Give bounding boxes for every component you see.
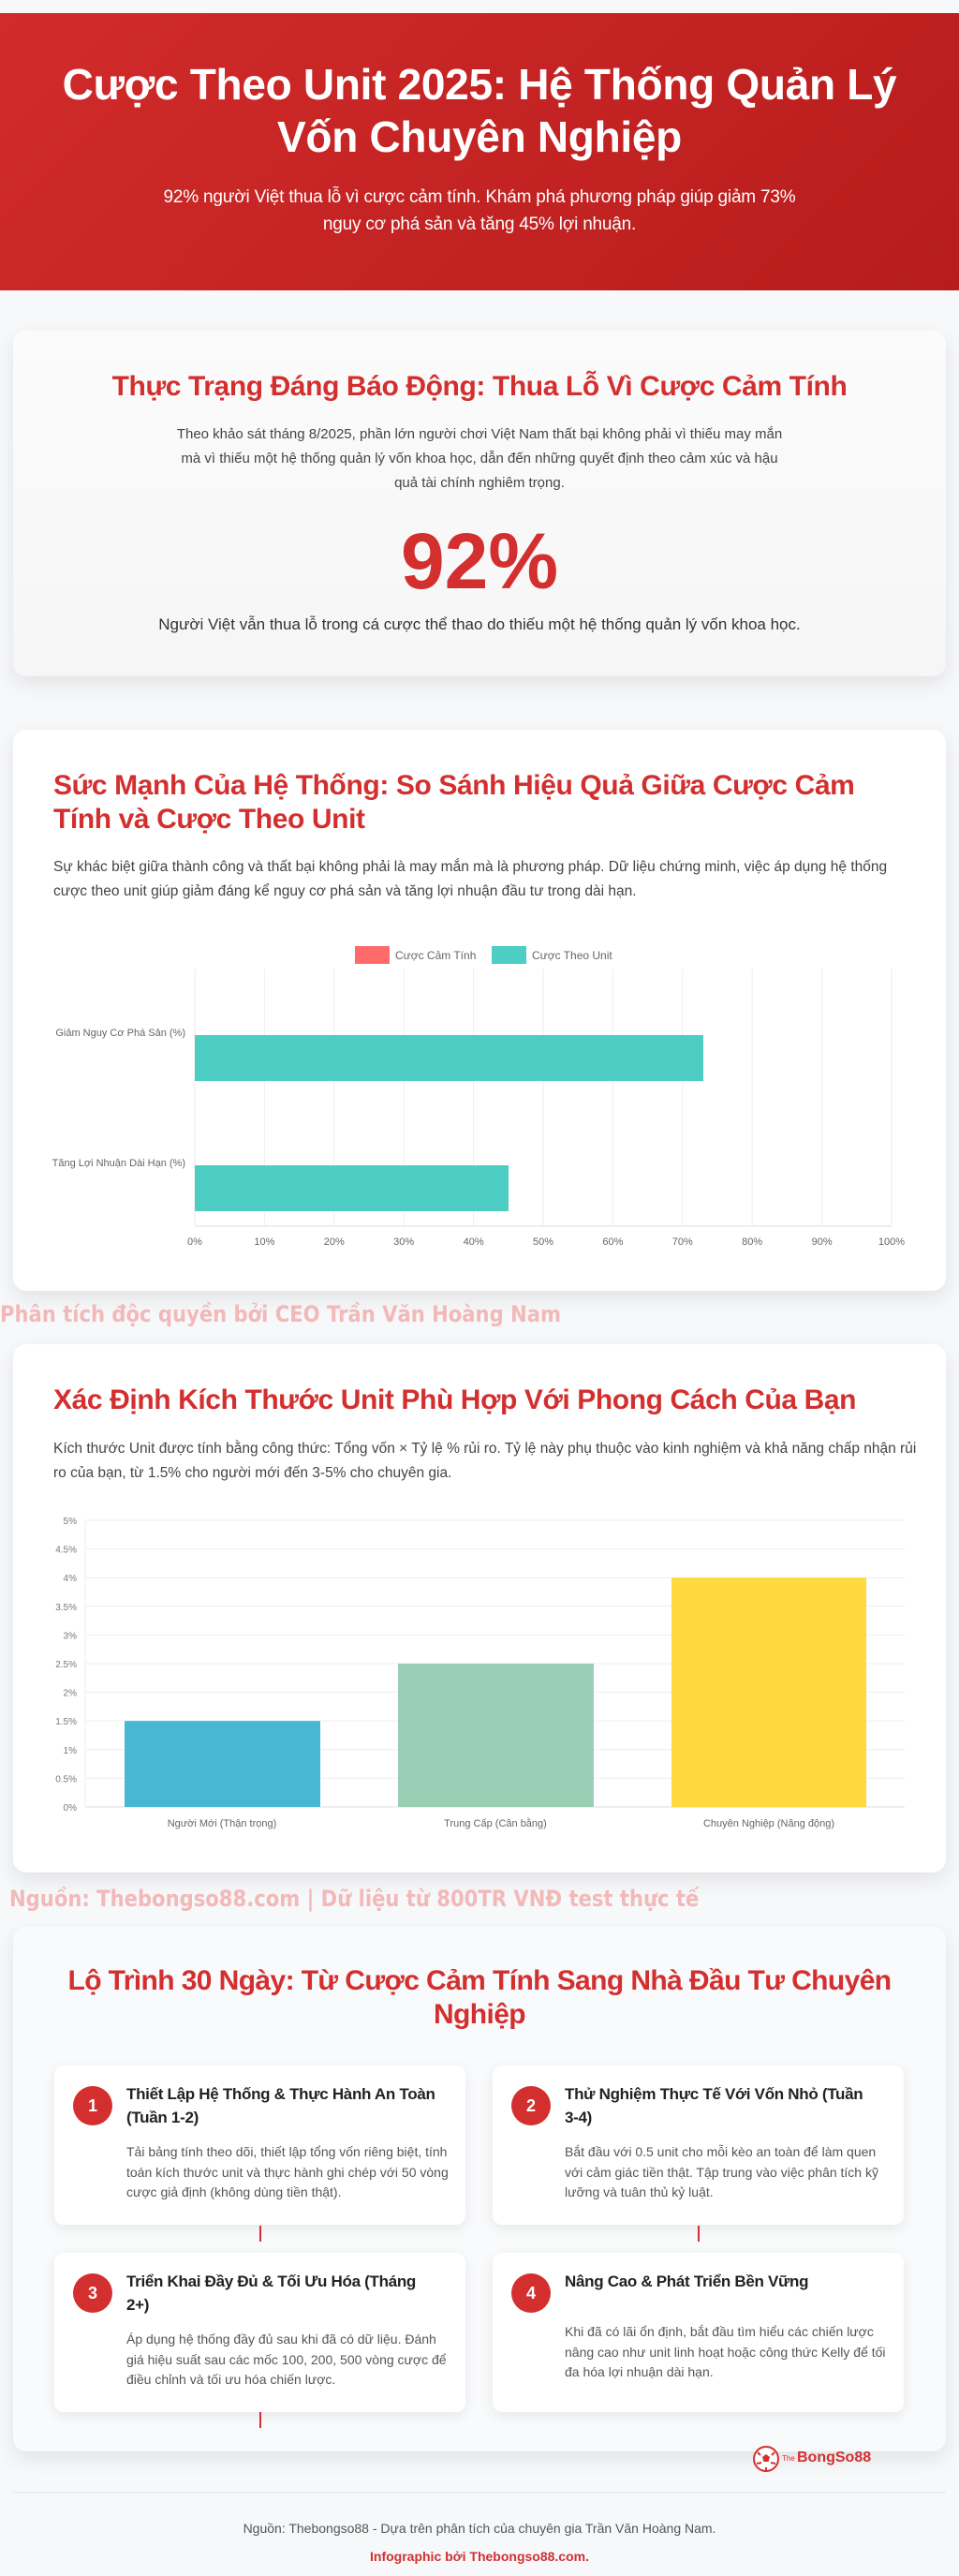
subtitle xyxy=(164,186,795,234)
x labels: Chuyên Nghiệp (Năng động) xyxy=(703,1818,834,1829)
y axis labels: 1% xyxy=(64,1746,77,1756)
heading: Thực Trạng Đáng Báo Động: Thua Lỗ Vì Cược Cảm Tính xyxy=(112,371,847,402)
step 2: Bắt đầu với 0.5 unit cho mỗi kèo an toàn để làm quen với cảm giác tiền thật. Tập trung vào việc phân tích kỹ lưỡng và tuân thủ kỷ luật. xyxy=(565,2144,878,2199)
y axis labels: 3% xyxy=(64,1631,77,1641)
header banner xyxy=(0,13,959,290)
bars xyxy=(125,1577,866,1807)
footer source: Nguồn: Thebongso88 - Dựa trên phân tích của chuyên gia Trần Văn Hoàng Nam. xyxy=(243,2521,716,2536)
legend xyxy=(355,946,612,964)
panel: system comparison xyxy=(13,730,946,1291)
x labels xyxy=(168,1817,834,1829)
step 3: Triển Khai Đầy Đủ & Tối Ưu Hóa (Tháng 2+) xyxy=(126,2273,416,2314)
vertical bar chart xyxy=(55,1517,905,1829)
x axis ticks: 70% xyxy=(672,1236,693,1248)
y axis labels: 4% xyxy=(64,1574,77,1584)
panel: 30-day roadmap xyxy=(13,1927,946,2451)
x axis ticks: 0% xyxy=(187,1236,202,1248)
footer credit: Infographic bởi Thebongso88.com. xyxy=(370,2549,589,2564)
x axis ticks: 50% xyxy=(533,1236,553,1248)
x axis ticks: 60% xyxy=(602,1236,624,1248)
y axis labels: 5% xyxy=(64,1517,77,1527)
step 4 xyxy=(493,2253,904,2412)
stat caption: Người Việt vẫn thua lỗ trong cá cược thể thao do thiếu một hệ thống quản lý vốn khoa học. xyxy=(158,615,801,633)
y axis labels xyxy=(55,1517,77,1814)
step 3 xyxy=(54,2253,465,2412)
step 1: Thiết Lập Hệ Thống & Thực Hành An Toàn (Tuần 1-2) xyxy=(126,2085,435,2126)
divider xyxy=(13,2492,946,2494)
title: Cược Theo Unit 2025: Hệ Thống Quản Lý Vốn Chuyên Nghiệp xyxy=(63,60,896,161)
big stat 92%: 92% xyxy=(401,517,558,605)
y axis labels: 2% xyxy=(64,1689,77,1699)
x axis ticks: 90% xyxy=(812,1236,833,1248)
connector 1 xyxy=(259,2226,261,2242)
category labels: Tăng Lợi Nhuận Dài Hạn (%) xyxy=(52,1158,185,1169)
y axis labels: 4.5% xyxy=(55,1546,77,1556)
step 4: 4 xyxy=(526,2284,536,2302)
description: Theo khảo sát tháng 8/2025, phần lớn người chơi Việt Nam thất bại không phải vì thiếu may mắn mà vì thiếu một hệ thống quản lý vốn khoa học, dẫn đến những quyết định theo cảm xúc và hậu quả tài chính nghiêm trọng. xyxy=(177,426,782,491)
x axis ticks: 20% xyxy=(324,1236,345,1248)
horizontal bar chart xyxy=(52,946,905,1248)
watermark: CEO analysis: Phân tích độc quyền bởi CEO Trần Văn Hoàng Nam xyxy=(0,1301,561,1327)
heading: Sức Mạnh Của Hệ Thống: So Sánh Hiệu Quả Giữa Cược Cảm Tính và Cược Theo Unit xyxy=(53,770,854,835)
footer xyxy=(243,2521,716,2564)
x labels: Người Mới (Thận trọng) xyxy=(168,1818,276,1829)
panel: alarming situation xyxy=(13,331,946,676)
y axis labels: 0% xyxy=(64,1803,77,1814)
step 4: Nâng Cao & Phát Triển Bền Vững xyxy=(565,2273,808,2290)
connector 3 xyxy=(259,2412,261,2428)
x axis ticks: 30% xyxy=(393,1236,414,1248)
connector 2 xyxy=(698,2226,700,2242)
bars xyxy=(195,1035,703,1211)
x axis ticks: 100% xyxy=(878,1236,905,1248)
subtitle: 92% người Việt thua lỗ vì cược cảm tính. Khám phá phương pháp giúp giảm 73% xyxy=(164,187,795,207)
panel: unit size xyxy=(13,1344,946,1873)
step 3: 3 xyxy=(88,2284,97,2302)
step 3: Áp dụng hệ thống đầy đủ sau khi đã có dữ liệu. Đánh giá hiệu suất sau các mốc 100, 200, 500 vòng cược để điều chỉnh và tối ưu hóa chiến lược. xyxy=(126,2332,447,2387)
step 1 xyxy=(54,2065,465,2225)
logo: BongSo88 xyxy=(753,2446,871,2472)
step 2: 2 xyxy=(526,2096,536,2115)
x axis ticks xyxy=(187,1236,905,1248)
legend: Cược Cảm Tính xyxy=(395,949,476,962)
y axis labels: 3.5% xyxy=(55,1603,77,1613)
y axis labels: 2.5% xyxy=(55,1660,77,1670)
subtitle: nguy cơ phá sản và tăng 45% lợi nhuận. xyxy=(323,215,636,234)
legend: Cược Theo Unit xyxy=(532,949,612,962)
step 1: Tải bảng tính theo dõi, thiết lập tổng vốn riêng biệt, tính toán kích thước unit và thực hành ghi chép với 50 vòng cược giả định (không dùng tiền thật). xyxy=(126,2144,449,2199)
step 2: Thử Nghiệm Thực Tế Với Vốn Nhỏ (Tuần 3-4) xyxy=(565,2085,863,2126)
step 2 xyxy=(493,2065,904,2225)
logo: BongSo88: The xyxy=(782,2454,795,2463)
heading: Lộ Trình 30 Ngày: Từ Cược Cảm Tính Sang Nhà Đầu Tư Chuyên Nghiệp xyxy=(67,1965,892,2030)
x labels: Trung Cấp (Cân bằng) xyxy=(444,1817,547,1829)
x axis ticks: 10% xyxy=(254,1236,275,1248)
description: Sự khác biệt giữa thành công và thất bại không phải là may mắn mà là phương pháp. Dữ liệu chứng minh, việc áp dụng hệ thống cược theo unit giúp giảm đáng kể nguy cơ phá sản và tăng lợi nhuận đầu tư trong dài hạn. xyxy=(53,859,887,899)
y axis labels: 0.5% xyxy=(55,1774,77,1784)
step 4: Khi đã có lãi ổn định, bắt đầu tìm hiểu các chiến lược nâng cao như unit linh hoạt hoặc công thức Kelly để tối đa hóa lợi nhuận dài hạn. xyxy=(565,2324,886,2379)
x axis ticks: 80% xyxy=(742,1236,762,1248)
logo: BongSo88: BongSo88 xyxy=(797,2450,871,2465)
watermark: source: Nguồn: Thebongso88.com | Dữ liệu từ 800TR VNĐ test thực tế xyxy=(9,1886,699,1912)
x axis ticks: 40% xyxy=(464,1236,484,1248)
description: Kích thước Unit được tính bằng công thức: Tổng vốn × Tỷ lệ % rủi ro. Tỷ lệ này phụ thuộc vào kinh nghiệm và khả năng chấp nhận rủi ro của bạn, từ 1.5% cho người mới đến 3-5% cho chuyên gia. xyxy=(53,1441,916,1481)
category labels: Giảm Nguy Cơ Phá Sản (%) xyxy=(55,1028,185,1039)
y axis labels: 1.5% xyxy=(55,1717,77,1727)
step 1: 1 xyxy=(88,2096,97,2115)
category labels xyxy=(52,1028,185,1169)
heading: Xác Định Kích Thước Unit Phù Hợp Với Phong Cách Của Bạn xyxy=(53,1384,856,1415)
